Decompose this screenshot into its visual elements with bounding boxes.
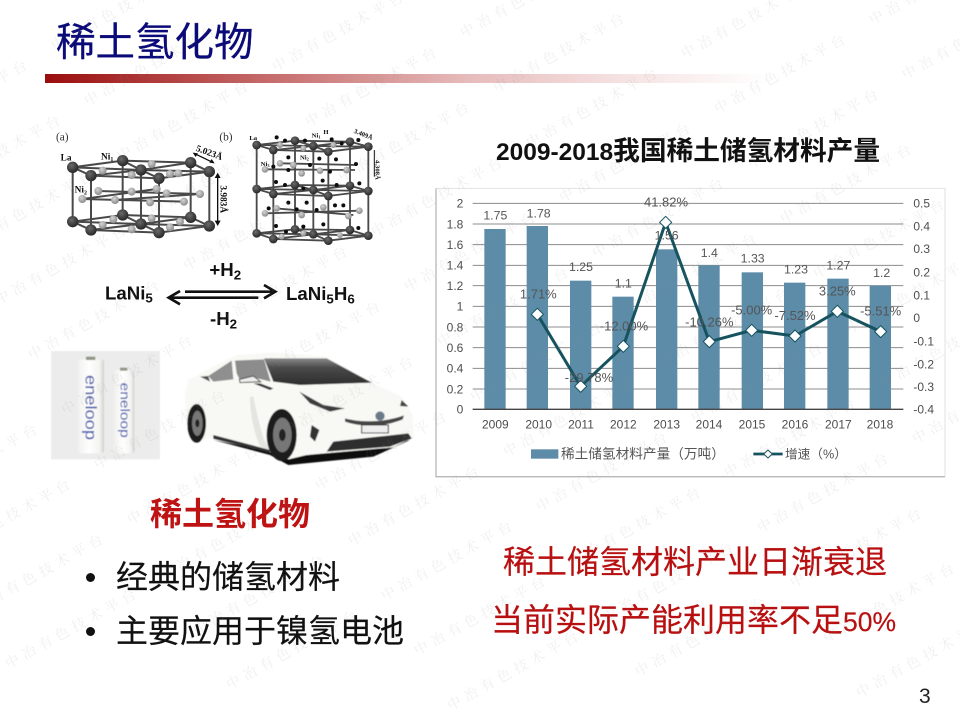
right axis labels: 0.3 <box>913 242 930 256</box>
title underline bar <box>45 74 770 83</box>
crystal structure (a) LaNi5 <box>56 132 229 238</box>
growth rate labels: 3.25% <box>819 284 856 299</box>
title: 稀土氢化物 <box>56 11 254 68</box>
watermark layer: 中冶有色技术平台 <box>654 281 797 372</box>
conclusion line 1: 稀土储氢材料产业日渐衰退 <box>503 544 887 580</box>
product label LaNi5H6: 6 <box>347 291 355 306</box>
year axis labels: 2012 <box>610 418 637 432</box>
growth line <box>531 216 887 392</box>
forward arrow <box>185 285 275 298</box>
growth rate labels: -5.51% <box>860 304 902 319</box>
watermark layer: 中冶有色技术平台 <box>499 370 642 461</box>
year axis labels: 2014 <box>696 418 723 432</box>
page number: 3 <box>919 685 931 708</box>
watermark layer: 中冶有色技术平台 <box>489 6 632 97</box>
conclusion line 2: 当前实际产能利用率不足50% <box>491 602 896 638</box>
watermark layer: 中冶有色技术平台 <box>720 391 863 482</box>
reactant label LaNi5: 5 <box>145 291 153 306</box>
watermark layer: 中冶有色技术平台 <box>710 27 853 118</box>
crystal structure (a) LaNi5: La <box>61 154 72 164</box>
watermark layer: 中冶有色技术平台 <box>555 116 698 207</box>
right axis labels: 0 <box>913 311 920 325</box>
crystal structure (b) LaNi5H6: 4.308Å <box>373 160 381 180</box>
photos <box>51 351 414 465</box>
crystal structure (a) LaNi5: 2 <box>84 190 87 196</box>
growth rate labels: -12.00% <box>600 318 649 333</box>
right axis labels: 0.1 <box>913 289 930 303</box>
crystal structure diagrams <box>56 127 381 245</box>
reaction equation <box>105 259 355 331</box>
chart legend: 增速（%） <box>785 447 847 461</box>
bar value labels: 1.75 <box>483 208 507 222</box>
bar and line chart <box>436 188 945 477</box>
watermark layer: 中冶有色技术平台 <box>344 459 487 550</box>
crystal structure (b) LaNi5H6: Ni <box>312 132 318 139</box>
crystal structure (b) LaNi5H6: 2 <box>307 156 309 161</box>
chart title: 2009-2018我国稀土储氢材料产量 <box>496 136 880 166</box>
right axis labels: -0.1 <box>913 334 934 348</box>
bar value labels: 1.2 <box>873 266 890 280</box>
year axis labels: 2018 <box>867 418 894 432</box>
watermark layer: 中冶有色技术平台 <box>156 493 299 584</box>
watermark layer: 中冶有色技术平台 <box>212 239 355 330</box>
bar value labels: 1.27 <box>826 258 850 272</box>
bar value labels: 1.33 <box>741 252 765 266</box>
crystal structure (b) LaNi5H6: La <box>249 135 258 142</box>
crystal structure (a) LaNi5: Ni <box>75 186 84 196</box>
photo: eneloop batteries: eneloop <box>117 383 132 438</box>
right axis labels: -0.4 <box>913 403 934 417</box>
left axis labels: 0.4 <box>447 362 464 376</box>
bar value labels: 1.4 <box>701 246 718 260</box>
watermark layer: 中冶有色技术平台 <box>400 205 543 296</box>
watermark layer: 中冶有色技术平台 <box>146 129 289 220</box>
reverse condition -H2: -H <box>210 308 230 329</box>
year axis labels: 2016 <box>782 418 809 432</box>
chart legend: 稀土储氢材料产量（万吨） <box>561 446 725 461</box>
growth rate labels: 41.82% <box>644 195 688 210</box>
growth rate labels: -5.00% <box>731 303 773 318</box>
watermark layer: 中冶有色技术平台 <box>80 19 223 110</box>
watermark layer: 中冶有色技术平台 <box>809 192 952 283</box>
watermark layer: 中冶有色技术平台 <box>631 590 774 681</box>
crystal structure (b) LaNi5H6: Ni <box>300 154 307 161</box>
watermark layer: 中冶有色技术平台 <box>776 137 919 228</box>
watermark layer: 中冶有色技术平台 <box>410 569 553 660</box>
watermark layer: 中冶有色技术平台 <box>123 438 266 529</box>
right axis labels: 0.4 <box>913 219 930 233</box>
left axis labels: 0.8 <box>447 320 464 334</box>
growth rate labels: -7.52% <box>774 308 816 323</box>
left axis labels: 1.6 <box>447 238 464 252</box>
product label LaNi5H6: H <box>334 283 347 304</box>
watermark layer: 中冶有色技术平台 <box>598 535 741 626</box>
left axis labels: 1.4 <box>447 259 464 273</box>
bar value labels: 1.56 <box>655 228 679 242</box>
left axis labels: 0.6 <box>447 341 464 355</box>
bar value labels: 1.78 <box>527 207 551 221</box>
watermark layer: 中冶有色技术平台 <box>743 82 886 173</box>
year axis labels: 2013 <box>653 418 680 432</box>
bar value labels <box>483 207 890 291</box>
watermark layer: 中冶有色技术平台 <box>222 603 365 694</box>
watermark layer: 中冶有色技术平台 <box>522 61 665 152</box>
watermark layer: 中冶有色技术平台 <box>819 556 960 647</box>
watermark layer: 中冶有色技术平台 <box>466 315 609 406</box>
watermark layer: 中冶有色技术平台 <box>278 349 421 440</box>
chart frame <box>436 188 945 477</box>
watermark layer: 中冶有色技术平台 <box>621 226 764 317</box>
crystal structure (a) LaNi5: Ni <box>101 152 110 162</box>
watermark layer: 中冶有色技术平台 <box>24 273 167 364</box>
left axis labels: 0.2 <box>447 382 464 396</box>
watermark layer: 中冶有色技术平台 <box>565 480 708 571</box>
bar value labels: 1.1 <box>615 277 632 291</box>
left axis labels: 1.2 <box>447 279 464 293</box>
watermark layer: 中冶有色技术平台 <box>113 74 256 165</box>
watermark layer: 中冶有色技术平台 <box>588 171 731 262</box>
year axis labels <box>482 418 894 432</box>
crystal structure (a) LaNi5: 1 <box>110 157 113 163</box>
crystal structure (b) LaNi5H6: Ni <box>261 161 267 168</box>
watermark layer: 中冶有色技术平台 <box>90 383 233 474</box>
crystal structure (b) LaNi5H6: 3 <box>267 163 270 168</box>
growth rate labels: 1.71% <box>520 287 557 302</box>
product label LaNi5H6: LaNi <box>286 283 326 304</box>
right axis labels <box>913 197 934 417</box>
watermark layer: 中冶有色技术平台 <box>377 514 520 605</box>
watermark layer: 中冶有色技术平台 <box>532 425 675 516</box>
watermark layer: 中冶有色技术平台 <box>753 446 896 537</box>
right axis labels: 0.5 <box>913 197 930 211</box>
watermark layer: 中冶有色技术平台 <box>189 548 332 639</box>
watermark layer: 中冶有色技术平台 <box>433 260 576 351</box>
watermark layer: 中冶有色技术平台 <box>443 624 586 715</box>
right axis labels: -0.2 <box>913 357 934 371</box>
crystal structure (b) LaNi5H6: (b) <box>219 132 233 144</box>
right axis labels: 0.2 <box>913 265 930 279</box>
watermark layer: 中冶有色技术平台 <box>245 294 388 385</box>
year axis labels: 2011 <box>568 418 594 432</box>
year axis labels: 2015 <box>739 418 766 432</box>
growth rate labels: -10.26% <box>685 314 734 329</box>
crystal structure (a) LaNi5: 3.983Å <box>217 185 229 213</box>
watermark layer: 中冶有色技术平台 <box>367 150 510 241</box>
left axis labels: 1 <box>457 300 464 314</box>
reverse arrow <box>169 291 258 304</box>
growth rate labels: -29.78% <box>565 370 614 385</box>
crystal structure (a) LaNi5: (a) <box>56 132 69 144</box>
product label LaNi5H6: 5 <box>326 291 334 306</box>
left axis labels <box>447 197 464 417</box>
crystal structure (b) LaNi5H6: H <box>323 129 329 136</box>
left axis labels: 0 <box>457 403 464 417</box>
reverse condition -H2: 2 <box>230 316 237 331</box>
bar value labels: 1.23 <box>784 263 808 277</box>
forward condition +H2: 2 <box>234 267 241 282</box>
left axis labels: 1.8 <box>447 217 464 231</box>
reactant label LaNi5: LaNi <box>105 282 145 303</box>
chart legend <box>531 446 847 461</box>
year axis labels: 2017 <box>825 418 852 432</box>
watermark layer: 中冶有色技术平台 <box>311 404 454 495</box>
left axis labels: 2 <box>457 197 464 211</box>
watermark layer: 中冶有色技术平台 <box>334 95 477 186</box>
bullet item 1: 经典的储氢材料 <box>116 559 340 595</box>
right axis labels: -0.3 <box>913 380 934 394</box>
bullet item 2: 主要应用于镍氢电池 <box>116 613 404 649</box>
watermark layer: 中冶有色技术平台 <box>1 582 144 673</box>
watermark layer: 中冶有色技术平台 <box>179 184 322 275</box>
crystal structure (b) LaNi5H6 <box>219 127 381 245</box>
forward condition +H2: +H <box>209 259 234 280</box>
photo: eneloop batteries <box>51 351 160 459</box>
subheading: rare earth hydrides: 稀土氢化物 <box>150 496 310 532</box>
growth rate labels <box>520 195 902 385</box>
watermark layer: 中冶有色技术平台 <box>786 501 929 592</box>
year axis labels: 2010 <box>525 418 552 432</box>
year axis labels: 2009 <box>482 418 509 432</box>
production bars <box>484 226 891 409</box>
crystal structure (a) LaNi5: 5.023Å <box>194 142 225 163</box>
watermark layer: 中冶有色技术平台 <box>57 328 200 419</box>
crystal structure (b) LaNi5H6: 3.409Å <box>353 127 374 142</box>
photo: eneloop batteries: eneloop <box>81 375 98 440</box>
watermark layer: 中冶有色技术平台 <box>687 336 830 427</box>
bar value labels: 1.25 <box>569 260 593 274</box>
crystal structure (b) LaNi5H6: 1 <box>318 134 320 139</box>
bullet list <box>86 559 404 649</box>
watermark layer: 中冶有色技术平台 <box>301 40 444 131</box>
photo: white hybrid car <box>185 353 414 465</box>
